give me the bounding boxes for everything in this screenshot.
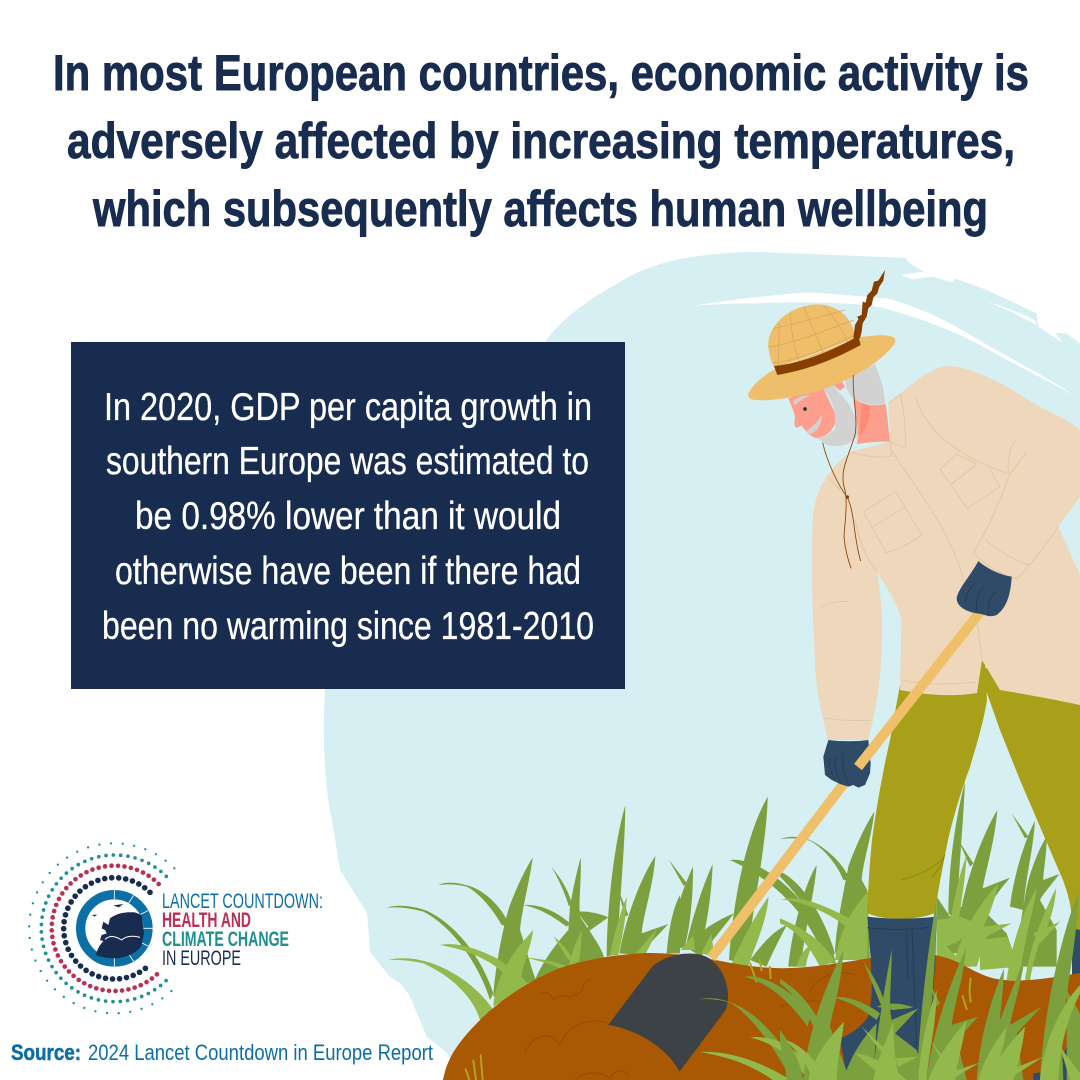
source line: Source: [11,1040,81,1065]
dotted rings [29,843,174,1013]
right boot shaft [1072,928,1080,985]
jacket [812,366,1080,740]
upper hoe handle [858,612,980,767]
back grass left [387,805,680,1020]
Europe map [92,904,144,958]
face [788,388,837,438]
callout: GDP statistic: be 0.98% lower than it would [135,495,561,538]
callout: GDP statistic: southern Europe was estimated to [106,440,589,483]
source line: 2024 Lancet Countdown in Europe Report [88,1040,433,1065]
farmer with hoe [443,270,1080,1080]
front grass middle [699,976,820,1080]
globe ring [81,895,148,962]
Lancet Countdown logo [29,843,323,1013]
neck [853,398,890,444]
soil mound [443,953,1080,1080]
callout: GDP statistic: In 2020, GDP per capita growth in [104,386,592,429]
logo wordmark: CLIMATE CHANGE [162,928,289,951]
logo wordmark [162,890,323,970]
hair [845,364,885,405]
callout: GDP statistic: been no warming since 1981-2010 [102,605,594,648]
hoe blade and lower handle [608,765,858,1072]
logo wordmark: HEALTH AND [162,909,251,932]
hat strings [823,375,861,568]
front grass right [780,892,1080,1080]
left hand glove [823,740,871,788]
beard and moustache [818,384,858,446]
figure upper body [748,270,1080,740]
hat [748,335,895,400]
back grass middle [667,797,836,967]
callout: GDP statistic: otherwise have been if there had [115,550,581,593]
boots [780,917,1080,1080]
right hand glove [957,561,1012,616]
trousers [867,660,1080,932]
logo wordmark: LANCET COUNTDOWN: [162,890,323,913]
back grass right [780,782,1060,980]
logo wordmark: IN EUROPE [162,947,241,970]
soil bump over boot [780,958,872,1040]
title [53,45,1029,237]
painted background blob [324,250,1080,1080]
callout: GDP statistic [71,342,625,689]
